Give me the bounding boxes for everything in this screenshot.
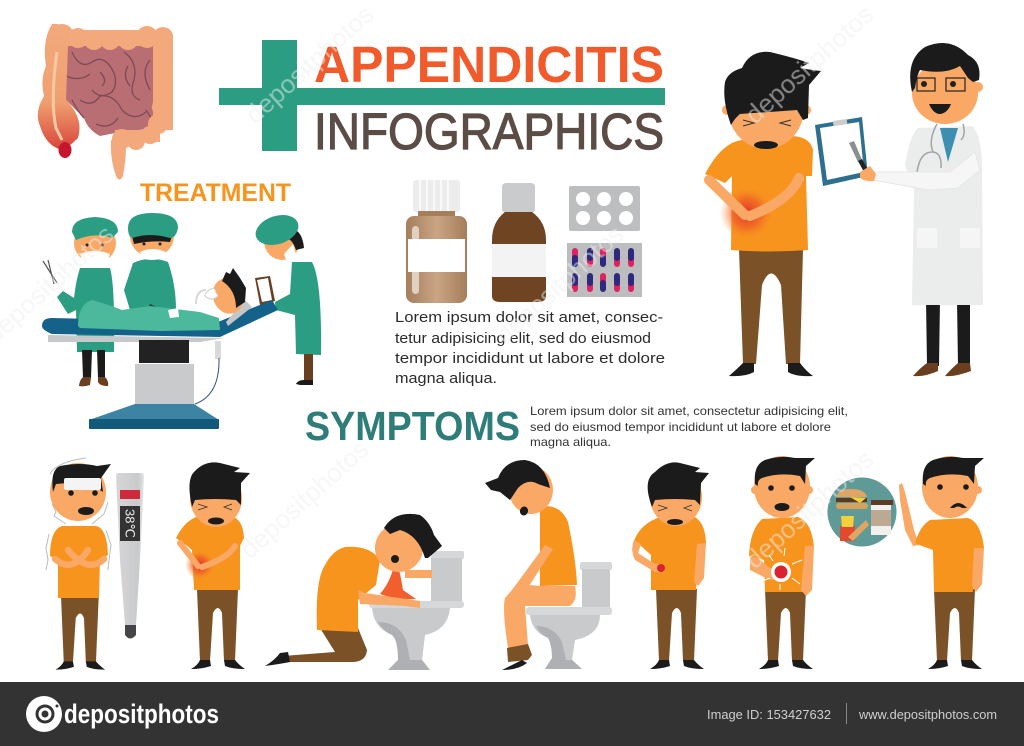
table bed <box>42 300 278 337</box>
illustration: doctor with clipboard <box>815 43 983 376</box>
icon: large intestine with inflamed appendix <box>38 24 173 180</box>
patient <box>78 268 252 331</box>
clipboard <box>815 117 868 186</box>
text block: treatment description: magna aliqua. <box>395 370 497 387</box>
toilet <box>369 551 464 670</box>
colon tail <box>111 134 126 180</box>
symptom: stomach pain from food <box>749 456 815 669</box>
text block: treatment description: Lorem ipsum dolor sit amet, consec- <box>395 309 663 326</box>
text block: treatment description <box>395 309 665 387</box>
brown bottle <box>492 183 546 302</box>
symptom: pressing abdomen pain <box>632 462 709 669</box>
stock watermarks: depositphotos <box>489 219 629 349</box>
symptom: fever with thermometer <box>46 458 111 670</box>
table column <box>139 340 189 363</box>
appendix <box>58 142 72 158</box>
title: appendicitis: APPENDICITIS <box>314 36 664 93</box>
text block: symptoms description: sed do eiusmod tempor incididunt ut labore et dolore <box>530 420 831 434</box>
text block: symptoms description: magna aliqua. <box>530 435 611 449</box>
logo wordmark: depositphotos <box>64 699 219 729</box>
surgeon middle <box>124 213 178 314</box>
symptom: stomach ache holding abdomen <box>176 462 250 669</box>
symptom: diarrhea on toilet <box>485 460 612 670</box>
surgeon left <box>43 217 118 386</box>
bottle with translucent cap <box>406 180 467 303</box>
footer bar <box>0 682 1024 746</box>
stock watermarks: depositphotos <box>239 0 379 129</box>
stock watermarks: depositphotos <box>739 0 879 129</box>
icon: junk food circle <box>828 478 896 546</box>
text block: treatment description: tempor incididunt ut labore et dolore <box>395 350 665 367</box>
text block: symptoms description: Lorem ipsum dolor sit amet, consectetur adipisicing elit, <box>530 404 848 418</box>
icon: thermometer 38 degrees: 38℃ <box>122 509 138 538</box>
title cross and rule <box>219 40 665 151</box>
heading: symptoms: SYMPTOMS <box>305 403 520 449</box>
illustration: medicine bottles and pill packs <box>406 180 642 303</box>
title: infographics: INFOGRAPHICS <box>314 103 664 160</box>
symptom: pointing at food <box>899 456 984 669</box>
illustration: patient holding stomach <box>705 52 821 376</box>
logo: camera icon <box>26 696 62 732</box>
website url: www.depositphotos.com <box>858 707 997 722</box>
illustration: surgery scene <box>42 210 321 429</box>
stock watermarks: depositphotos <box>234 434 374 564</box>
stock watermarks: depositphotos <box>739 444 879 574</box>
heading: treatment: TREATMENT <box>140 179 291 207</box>
stock watermarks <box>0 0 879 574</box>
text block: symptoms description <box>530 404 848 449</box>
image id: Image ID: 153427632 <box>707 707 831 722</box>
capsule blister <box>567 243 642 297</box>
text block: treatment description: tetur adipisicing elit, sed do eiusmod <box>395 330 651 347</box>
tablet blister <box>569 186 640 231</box>
symptom: vomiting over toilet <box>265 514 464 670</box>
toilet <box>526 562 612 669</box>
icon: thermometer 38 degrees <box>116 473 144 638</box>
surgeon right <box>252 210 321 385</box>
